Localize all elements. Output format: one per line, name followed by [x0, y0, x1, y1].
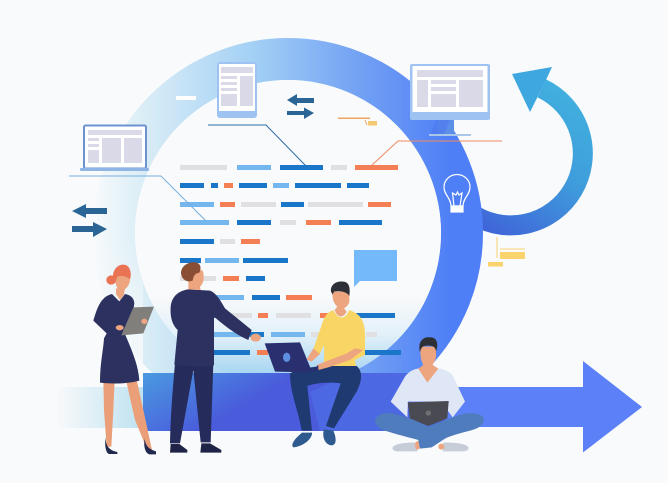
yellow shirt man hair	[331, 281, 350, 296]
yellow shirt man forearm	[307, 348, 363, 370]
suit man head	[188, 268, 204, 290]
woman dress	[93, 294, 139, 383]
woman tablet	[121, 307, 154, 335]
task timeline bars	[180, 165, 401, 355]
suit man hair	[181, 262, 201, 281]
icon: light bulb	[444, 174, 470, 212]
woman shoes	[105, 437, 156, 454]
decoration: small orange marks	[338, 118, 377, 126]
cross legged man trousers	[375, 413, 484, 449]
curved return arrow	[469, 67, 583, 225]
circular ring	[80, 59, 462, 407]
yellow shirt man trousers	[290, 366, 361, 431]
connector line: monitor	[372, 141, 502, 165]
connector line: laptop	[69, 176, 206, 221]
woman legs	[103, 380, 152, 450]
suit man hand	[250, 334, 261, 342]
icon: exchange arrows top	[287, 94, 314, 119]
decoration: yellow marks	[488, 237, 525, 266]
yellow shirt man laptop	[265, 342, 318, 372]
cross legged man head and neck	[418, 347, 438, 383]
cross legged man laptop	[408, 401, 449, 426]
icon: laptop	[80, 126, 149, 171]
pale tail of horizontal arrow	[50, 387, 143, 428]
yellow shirt man shoes	[292, 429, 336, 447]
cross legged man shirt	[391, 368, 465, 417]
yellow shirt man shirt	[313, 310, 365, 366]
suit trousers	[170, 363, 213, 443]
woman hair	[106, 265, 131, 285]
cross legged man feet	[392, 443, 468, 451]
person: woman with tablet	[93, 265, 156, 454]
icon: monitor	[410, 64, 490, 136]
person: seated man in yellow shirt	[265, 281, 365, 447]
woman neck and head	[115, 271, 130, 300]
person: seated man with laptop	[375, 337, 484, 451]
woman hands	[116, 319, 147, 330]
suit jacket	[171, 289, 252, 366]
person: man in suit	[170, 262, 261, 453]
icon: tablet	[217, 62, 257, 118]
connector line: tablet	[208, 125, 306, 166]
yellow shirt man head and neck	[333, 292, 349, 316]
decoration: white dash	[176, 96, 196, 100]
suit shoes	[170, 443, 221, 453]
cross legged man hair	[419, 337, 437, 352]
icon: exchange arrows left	[72, 204, 107, 237]
horizontal progress arrow	[143, 361, 642, 452]
speech bubble	[354, 250, 397, 287]
